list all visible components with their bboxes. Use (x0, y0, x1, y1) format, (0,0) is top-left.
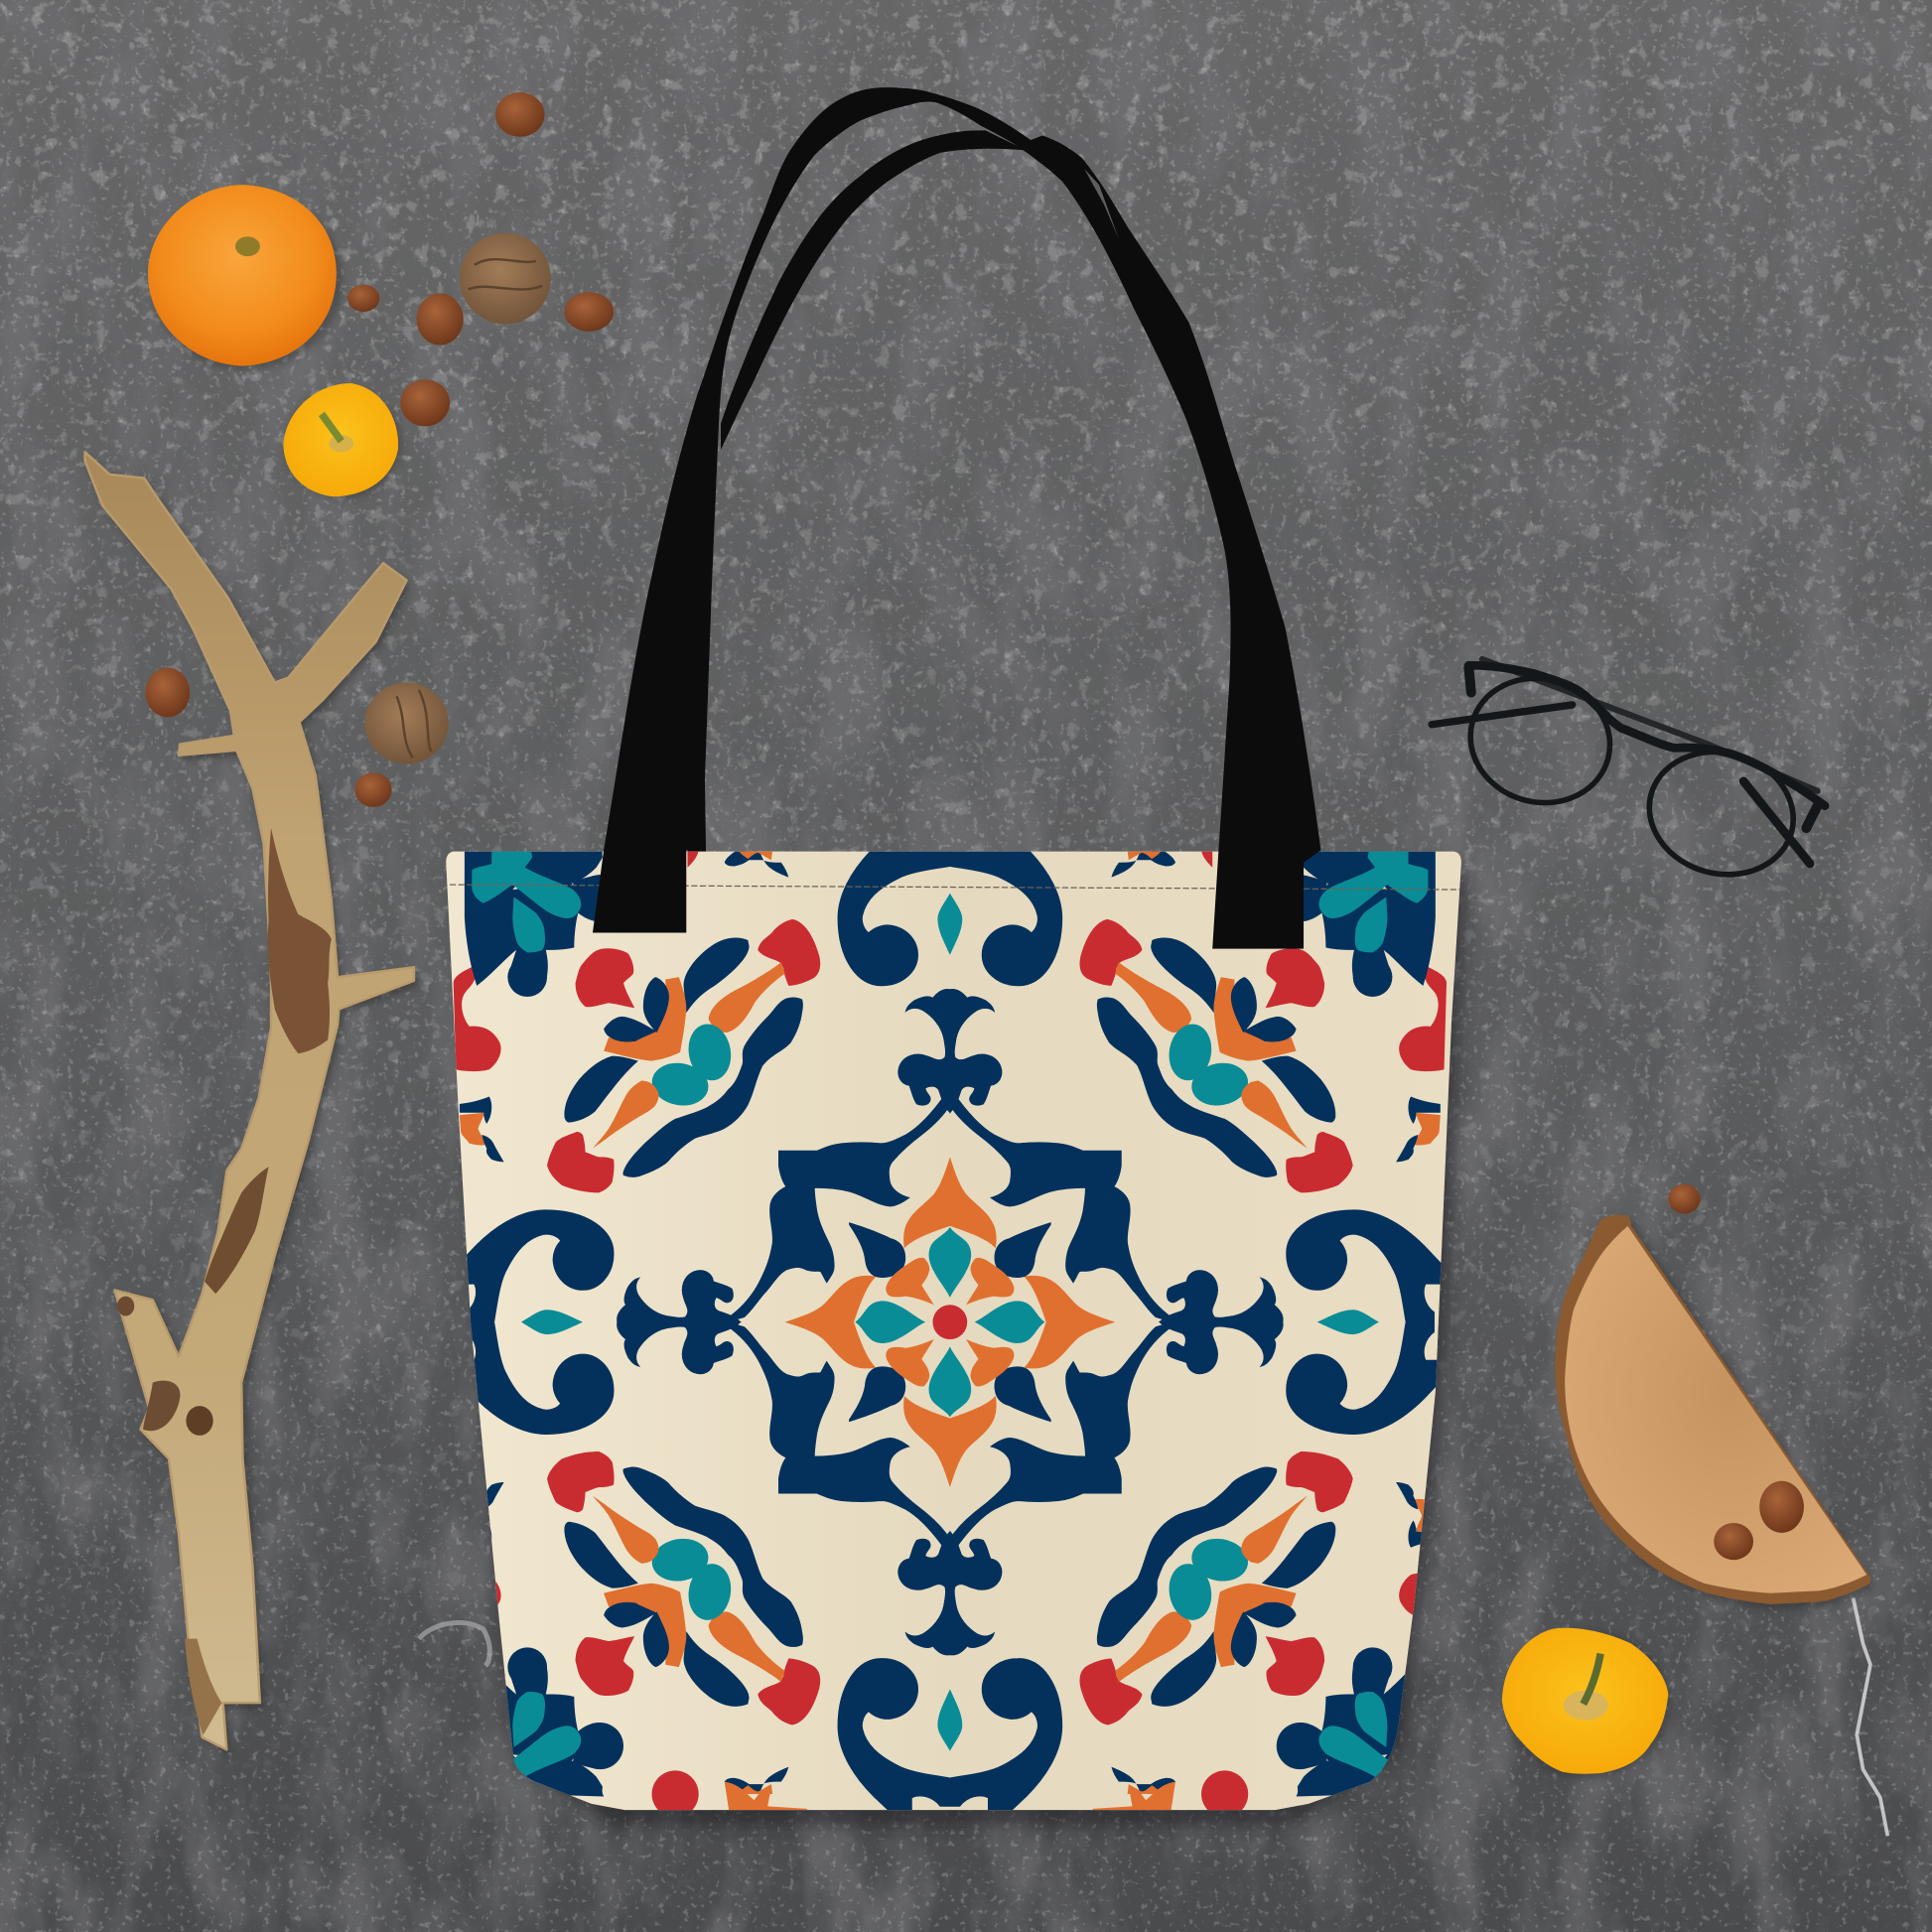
fleur ornaments in four directions (618, 989, 1283, 1655)
tote bag body (446, 827, 1461, 1818)
yellow squash bottom right (1502, 1628, 1671, 1779)
corner motif upper left (454, 848, 820, 1192)
hazelnuts on and near wood slice (1668, 1184, 1804, 1560)
bag pattern: tile motif (450, 827, 1460, 1818)
corner motif lower right (1080, 1451, 1447, 1796)
central medallion (727, 1093, 1173, 1552)
nuts: hazelnuts and walnuts scattered top left (145, 92, 614, 807)
handle: right strap and sewn tab (1017, 136, 1320, 949)
handle: second strap arch on the inside (721, 130, 1027, 450)
orange pumpkin (148, 185, 343, 369)
half-round wood slice (1555, 1215, 1874, 1610)
bottom edge red and orange fragments (651, 1770, 1249, 1810)
C-scrolls with teal leaves on four sides (455, 827, 1446, 1818)
yellow squash top left (283, 383, 402, 497)
handle: left strap over the top with sewn tab (593, 87, 1047, 932)
corner motif lower left (454, 1451, 820, 1796)
handle: back strip behind the bag (688, 776, 706, 857)
bag shadow (459, 869, 1466, 1826)
corner motif upper right (1080, 848, 1447, 1192)
wooden stick with branches (85, 452, 418, 1754)
eyeglasses (1432, 659, 1825, 891)
